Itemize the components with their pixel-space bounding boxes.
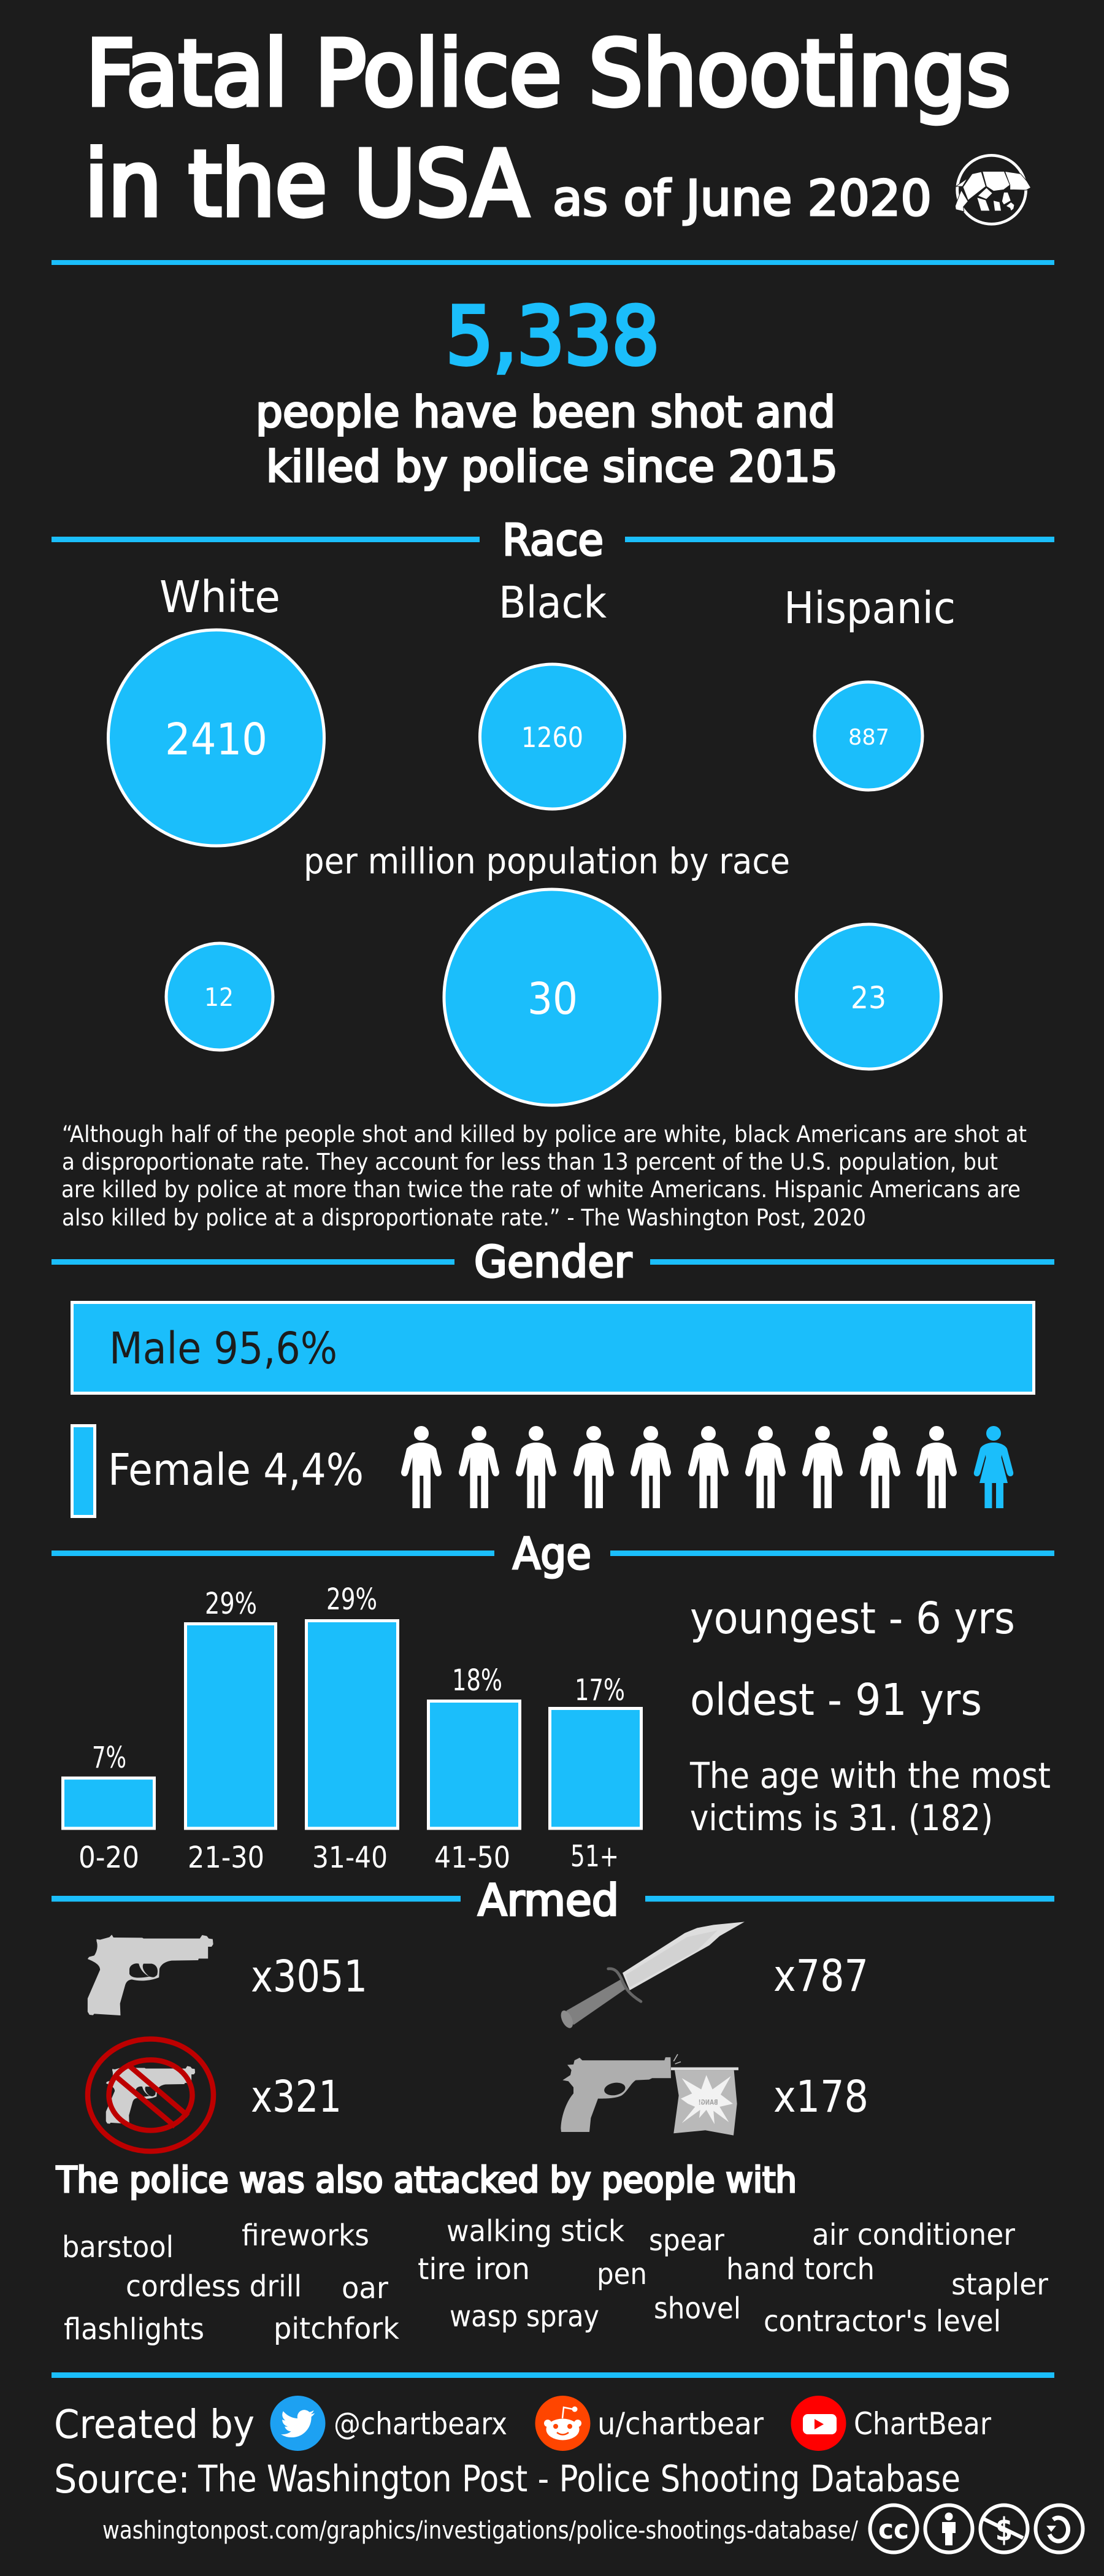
icon: toy gun with flag: [561, 2054, 738, 2136]
bar 41-50: [428, 1663, 520, 1875]
bubble: hispanic 23: [796, 924, 941, 1069]
bar 51+: 51+: [570, 1839, 619, 1874]
big number: 5,338: [446, 289, 659, 383]
word cloud: other weapons: barstool: [62, 2230, 174, 2264]
icon: reddit: [535, 2396, 590, 2451]
word cloud: other weapons: spear: [649, 2223, 724, 2258]
word cloud: other weapons: shovel: [654, 2291, 741, 2326]
white label: White: [159, 572, 280, 623]
panel: gender: [72, 1303, 1034, 1516]
word cloud: other weapons: stapler: [951, 2267, 1048, 2302]
age facts text: oldest - 91 yrs: [690, 1674, 982, 1725]
word cloud: other weapons: cordless drill: [126, 2269, 302, 2304]
age facts text: The age with the most: [689, 1755, 1051, 1796]
quote text block: a disproportionate rate. They account for less than 13 percent of the U.S. population, but: [62, 1149, 998, 1175]
count: gun: x3051: [251, 1951, 367, 2002]
subheading: other weapons: The police was also attacked by people with: [56, 2159, 797, 2201]
word cloud: other weapons: pitchfork: [274, 2312, 399, 2346]
bubble: hispanic 887: [815, 682, 922, 790]
bar 0-20: 0-20: [79, 1841, 139, 1875]
source label: Source:: [54, 2457, 190, 2502]
male bar: [72, 1303, 1034, 1393]
bubble: hispanic 887: 887: [848, 725, 889, 750]
word cloud: other weapons: [62, 2214, 1048, 2347]
panel: per million bubbles: [166, 889, 941, 1105]
bar 41-50: 41-50: [434, 1841, 510, 1875]
youtube channel: ChartBear: [854, 2406, 992, 2442]
title: as of June 2020: [553, 170, 932, 227]
word cloud: other weapons: wasp spray: [450, 2299, 599, 2334]
heading: gender: Gender: [474, 1236, 632, 1287]
icon: knife: [559, 1922, 745, 2030]
headline statistic: [256, 289, 838, 492]
word cloud: other weapons: air conditioner: [812, 2218, 1015, 2252]
count: toy gun: x178: [773, 2071, 868, 2122]
icon: twitter: [270, 2396, 325, 2451]
title: [85, 21, 1011, 237]
bar 21-30: 21-30: [188, 1841, 264, 1875]
bubble: black 30: [444, 889, 660, 1105]
bar 31-40: [307, 1582, 397, 1875]
heading: armed: Armed: [478, 1875, 619, 1926]
bar 31-40: 29%: [326, 1582, 377, 1617]
age facts text: victims is 31. (182): [690, 1797, 993, 1839]
bubble: white 12: 12: [204, 983, 234, 1012]
bar 51+: 17%: [575, 1673, 625, 1708]
icon: toy gun with flag: BANG!: [699, 2098, 718, 2107]
age facts text: youngest - 6 yrs: [690, 1593, 1015, 1644]
icon: unarmed: [88, 2039, 213, 2152]
icon: bear logo: [955, 155, 1031, 224]
word cloud: other weapons: pen: [597, 2257, 647, 2291]
word cloud: other weapons: flashlights: [64, 2312, 204, 2347]
word cloud: other weapons: oar: [342, 2271, 388, 2306]
headline caption: [256, 387, 838, 492]
female bar: Female 4,4%: [108, 1444, 364, 1495]
bar 21-30: 29%: [205, 1587, 257, 1621]
word cloud: other weapons: fireworks: [242, 2218, 369, 2253]
bar 0-20: [63, 1741, 155, 1875]
count: unarmed: x321: [251, 2071, 342, 2122]
bar 0-20: 7%: [92, 1741, 126, 1775]
pictogram: people row: [401, 1426, 1013, 1508]
footer: [54, 2396, 1083, 2553]
panel: race totals: [108, 572, 956, 846]
bubble: white 12: [166, 943, 273, 1050]
bar chart: age groups: [63, 1582, 642, 1875]
hispanic label: Hispanic: [784, 583, 956, 634]
bar 21-30: [185, 1587, 276, 1875]
bar 41-50: 18%: [452, 1663, 502, 1698]
word cloud: other weapons: walking stick: [447, 2214, 624, 2248]
heading: age: Age: [513, 1528, 591, 1579]
bar 51+: [550, 1673, 642, 1874]
black label: Black: [499, 577, 607, 628]
source url: washingtonpost.com/graphics/investigations/police-shootings-database/: [102, 2517, 859, 2545]
icon: creative commons licence: $: [995, 2512, 1013, 2548]
source name: The Washington Post - Police Shooting Database: [197, 2458, 960, 2501]
title: in the USA: [85, 131, 529, 237]
age facts text: [689, 1593, 1051, 1839]
bubble: black 30: 30: [527, 973, 578, 1024]
twitter handle: @chartbearx: [334, 2406, 507, 2442]
quote text block: “Although half of the people shot and killed by police are white, black Americans are shot at: [62, 1121, 1027, 1148]
icon: creative commons licence: [870, 2505, 1083, 2553]
word cloud: other weapons: hand torch: [726, 2252, 875, 2287]
bubble: white 2410: 2410: [165, 714, 267, 765]
created by label: Created by: [54, 2402, 255, 2448]
icon: gun: [88, 1934, 213, 2015]
panel: armed: [88, 1922, 868, 2152]
quote text block: are killed by police at more than twice the rate of white Americans. Hispanic Americans are: [61, 1176, 1021, 1203]
icon: youtube: [791, 2396, 846, 2451]
bubble: black 1260: [480, 664, 624, 809]
word cloud: other weapons: contractor's level: [764, 2304, 1001, 2339]
count: knife: x787: [773, 1950, 868, 2001]
bubble: black 1260: 1260: [521, 721, 583, 754]
bubble: hispanic 23: 23: [851, 980, 886, 1016]
headline caption: killed by police since 2015: [266, 442, 838, 492]
heading: race: Race: [502, 515, 604, 565]
quote text block: [61, 1121, 1027, 1231]
male bar: Male 95,6%: [109, 1323, 337, 1374]
title: Fatal Police Shootings: [86, 21, 1011, 126]
bar 31-40: 31-40: [312, 1841, 388, 1875]
word cloud: other weapons: tire iron: [418, 2252, 530, 2287]
bubble: white 2410: [108, 630, 324, 846]
reddit handle: u/chartbear: [597, 2406, 764, 2442]
icon: female figure: [974, 1426, 1013, 1508]
quote text block: also killed by police at a disproportionate rate.” - The Washington Post, 2020: [62, 1205, 866, 1231]
subheading: per million: per million population by race: [304, 840, 790, 882]
icon: creative commons licence: cc: [878, 2514, 909, 2545]
female bar: [72, 1425, 364, 1516]
headline caption: people have been shot and: [256, 387, 835, 437]
